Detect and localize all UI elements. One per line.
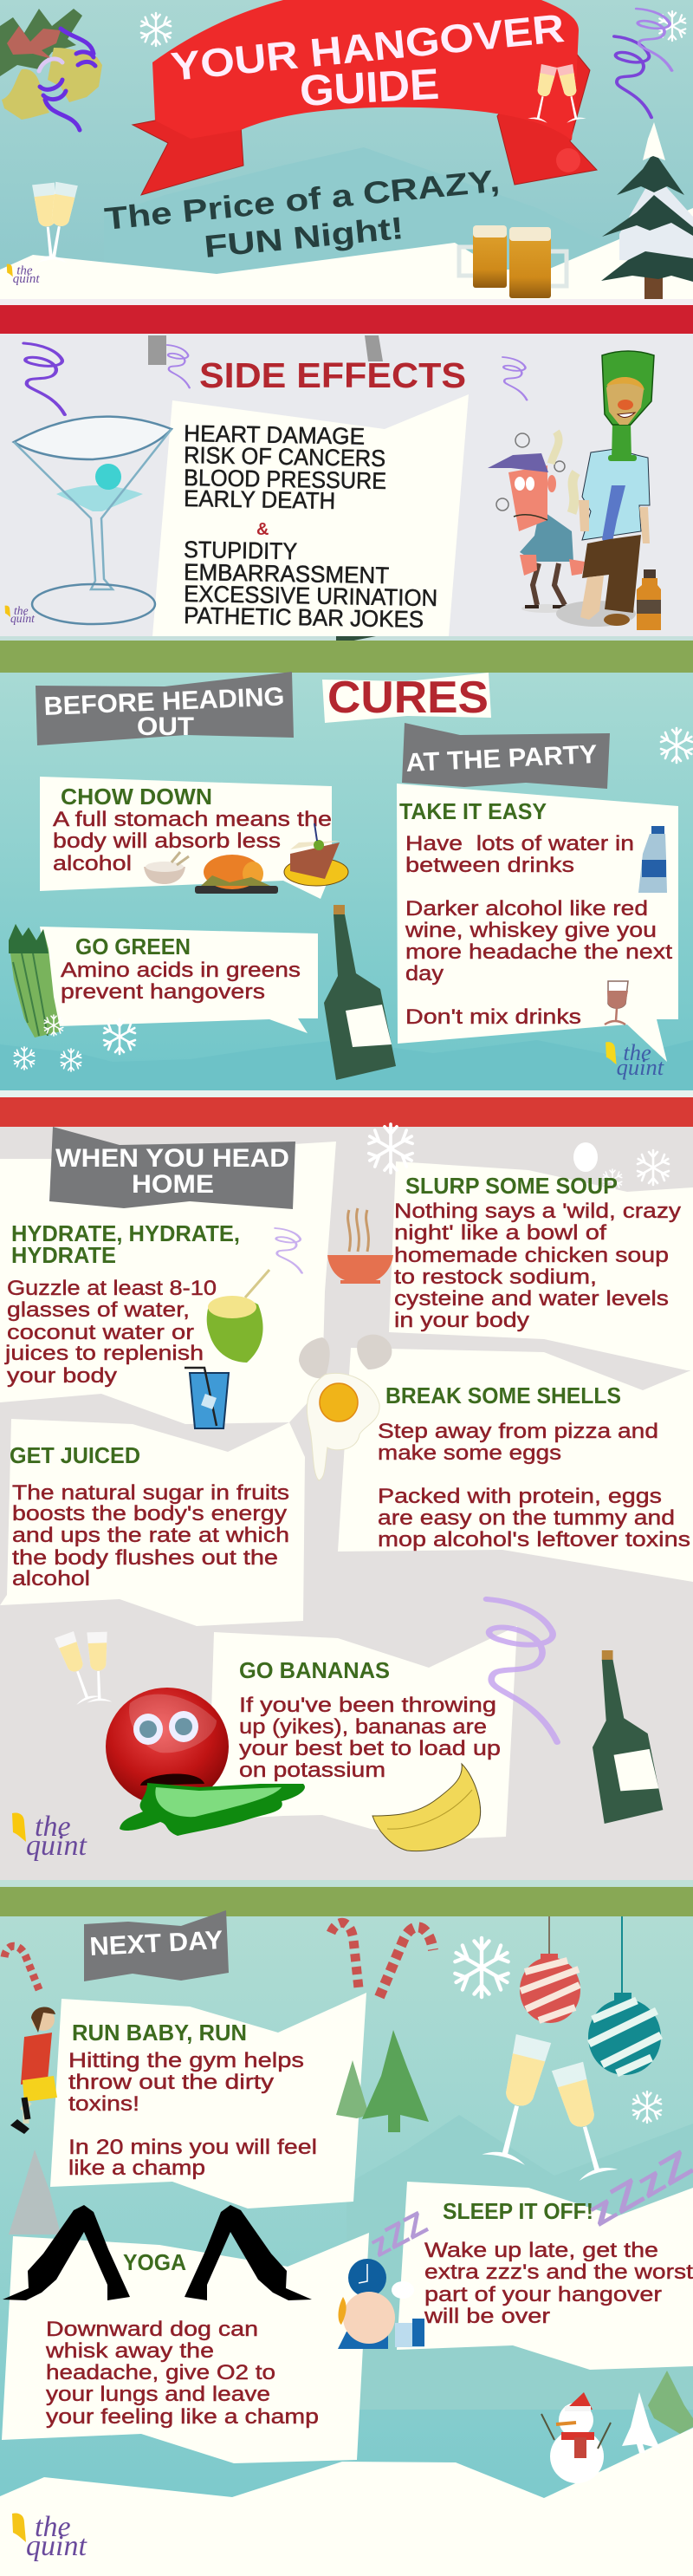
icon: club sandwich	[284, 823, 348, 886]
panel: at the party callout: wine, whiskey give you	[405, 919, 657, 942]
icon: confetti section left	[24, 343, 65, 414]
text block: slurp some soup: to restock sodium,	[394, 1265, 597, 1289]
panel: sleep it off: Wake up late, get the	[424, 2239, 658, 2262]
icon: green tree	[648, 2371, 693, 2434]
text block: hydrate: glasses of water,	[7, 1298, 190, 1322]
icon: yoga figure left	[3, 2205, 130, 2300]
text block: break some shells: Packed with protein, eggs	[378, 1485, 662, 1508]
icon: snowflake lower left	[104, 1019, 135, 1054]
icon: snowflake top	[141, 13, 171, 46]
decorative red bar	[0, 305, 693, 334]
text block: list of side effects: RISK OF CANCERS	[184, 442, 385, 472]
icon: snowflake top of home section	[369, 1124, 412, 1173]
icon: water bottle	[638, 826, 667, 893]
icon: dizzy man cartoon	[488, 432, 585, 613]
text block: hydrate: HYDRATE	[11, 1242, 116, 1268]
panel: chow down callout: CHOW DOWN	[61, 784, 212, 810]
heading ribbon: when you head home: HOME	[132, 1170, 214, 1199]
text block: go bananas: your best bet to load up	[239, 1737, 501, 1760]
icon: candy cane centre	[331, 1922, 359, 1988]
icon: soup bowl	[327, 1208, 393, 1284]
text block: get juiced: boosts the body's energy	[12, 1502, 287, 1525]
icon: cracked egg	[299, 1335, 392, 1480]
heading ribbon: before heading out: BEFORE HEADING	[43, 682, 285, 721]
panel: yoga: your lungs and leave	[46, 2383, 270, 2406]
icon: grey pine tree	[9, 2150, 61, 2234]
panel: at the party callout	[397, 784, 678, 1062]
text block: get juiced: alcohol	[12, 1567, 90, 1590]
panel: sleep it off: SLEEP IT OFF!	[443, 2198, 593, 2224]
icon: zzz right: zZzZ	[580, 2142, 693, 2235]
panel: sleep it off: will be over	[424, 2305, 550, 2328]
icon: confetti by heading	[167, 345, 190, 388]
panel: red ribbon banner	[133, 0, 597, 195]
subtitle: price of a crazy fun night	[103, 162, 502, 264]
text block: hydrate: HYDRATE, HYDRATE,	[11, 1220, 240, 1246]
panel: run baby run: Hitting the gym helps	[68, 2049, 304, 2072]
text block: slurp some soup: homemade chicken soup	[394, 1244, 669, 1267]
panel: at the party callout: between drinks	[405, 854, 574, 877]
text block: get juiced	[10, 1442, 289, 1590]
panel: yoga: your feeling like a champ	[46, 2405, 319, 2429]
text block: list of side effects: STUPIDITY	[184, 537, 297, 564]
icon: snowflake small left	[14, 1047, 35, 1070]
icon: confetti near bells	[39, 29, 95, 130]
panel: run baby run: In 20 mins you will feel	[68, 2136, 317, 2159]
panel: chow down callout: alcohol	[53, 852, 132, 875]
panel: yoga: headache, give O2 to	[46, 2361, 275, 2384]
panel: chow down callout: body will absorb less	[53, 829, 281, 853]
icon: wine bottle right	[593, 1650, 663, 1824]
heading ribbon: before heading out: OUT	[137, 712, 194, 741]
text block: list of side effects: EARLY DEATH	[184, 485, 335, 514]
icon: snowflake right	[661, 728, 692, 763]
icon: christmas bells	[0, 9, 102, 120]
logo: the quint top: quint	[13, 272, 40, 286]
icon: pine trees	[336, 2030, 429, 2132]
text block: list of side effects: &	[256, 520, 269, 539]
panel: sleep it off	[397, 2182, 693, 2370]
icon: confetti top right	[614, 36, 651, 118]
logo: the quint section two: quint	[10, 612, 36, 625]
icon: roast turkey	[195, 855, 278, 894]
icon: snowflake by flutes	[633, 2091, 661, 2123]
panel: run baby run	[50, 1993, 366, 2208]
panel: go green callout: GO GREEN	[75, 933, 191, 959]
logo: the quint bottom: quint	[26, 2530, 87, 2562]
heading ribbon: at the party	[402, 723, 610, 789]
title: your hangover guide	[169, 5, 567, 115]
text block: hydrate: your body	[7, 1364, 117, 1388]
icon: snowflake next day	[455, 1938, 508, 1997]
text block: break some shells	[378, 1382, 690, 1551]
icon: beer mugs	[459, 225, 567, 298]
logo: the quint home section: the	[35, 1811, 71, 1843]
heading ribbon: at the party: AT THE PARTY	[405, 740, 598, 777]
text block: hydrate: Guzzle at least 8-10	[7, 1277, 217, 1300]
logo: the quint section three: quint	[617, 1054, 664, 1080]
icon: confetti right of heading	[502, 357, 527, 400]
icon: runner	[10, 2007, 57, 2134]
logo: the quint bottom: the	[35, 2511, 71, 2543]
panel: cures background	[0, 673, 693, 1097]
icon: man with bottle head	[556, 351, 654, 627]
icon: coconut	[207, 1270, 269, 1363]
icon: whisky bottle	[637, 569, 661, 630]
icon: confetti go bananas	[487, 1599, 557, 1742]
icon: snowy pine tree	[601, 122, 693, 299]
text block: break some shells: make some eggs	[378, 1441, 561, 1465]
icon: banana	[372, 1764, 481, 1851]
panel: run baby run: like a champ	[68, 2156, 205, 2180]
icon: confetti hydrate	[275, 1228, 302, 1273]
icon: snowflake on asparagus	[44, 1015, 63, 1036]
panel: run baby run: throw out the dirty	[68, 2071, 274, 2094]
panel: sleep it off: part of your hangover	[424, 2283, 662, 2306]
panel: side effects	[0, 334, 693, 644]
decorative green bar two	[0, 1887, 693, 1916]
text block: list of side effects: BLOOD PRESSURE	[184, 465, 386, 494]
icon: asparagus	[9, 924, 61, 1038]
icon: teal bauble	[588, 1916, 661, 2075]
panel: at the party callout: more headache the next	[405, 940, 672, 964]
text block: get juiced: and ups the rate at which	[12, 1524, 289, 1547]
icon: candy cane left	[4, 1946, 40, 1992]
text block: hydrate	[4, 1220, 240, 1388]
icon: snowman	[541, 2392, 611, 2483]
heading ribbon: when you head home: WHEN YOU HEAD	[55, 1144, 289, 1173]
text block: slurp some soup: night' like a bowl of	[394, 1221, 606, 1245]
text block: get juiced: the body flushes out the	[12, 1546, 278, 1570]
heading: side effects: SIDE EFFECTS	[199, 355, 466, 395]
logo: the quint top	[7, 263, 40, 286]
icon: rice bowl	[144, 852, 189, 884]
panel: yoga: YOGA	[123, 2249, 186, 2275]
text block: break some shells: BREAK SOME SHELLS	[385, 1382, 621, 1408]
text block: get juiced: The natural sugar in fruits	[12, 1481, 289, 1505]
icon: yoga figure right	[185, 2205, 312, 2300]
icon: champagne flutes	[52, 1630, 112, 1705]
panel: run baby run: toxins!	[68, 2092, 139, 2116]
panel: go green callout	[40, 927, 318, 1033]
icon: candy cane right	[379, 1927, 433, 1997]
icon: champagne flutes next day	[482, 2033, 618, 2181]
logo: the quint bottom	[12, 2511, 87, 2562]
panel: run baby run: RUN BABY, RUN	[72, 2020, 247, 2046]
text block: slurp some soup	[394, 1173, 681, 1332]
panel: yoga: whisk away the	[45, 2339, 214, 2363]
text block: go bananas: on potassium	[239, 1759, 385, 1782]
logo: the quint section two	[5, 604, 36, 625]
icon: champagne flutes left	[29, 181, 81, 263]
logo: the quint section two: the	[14, 604, 29, 617]
logo: the quint section three	[606, 1039, 664, 1080]
icon: martini glass	[14, 417, 172, 624]
text block: go bananas: If you've been throwing	[239, 1694, 496, 1717]
text block: list of side effects: HEART DAMAGE	[184, 420, 365, 450]
subtitle: price of a crazy fun night: FUN Night!	[203, 210, 405, 264]
icon: zzz left: zZZ	[365, 2205, 433, 2265]
panel: at the party callout: Don't mix drinks	[405, 1005, 581, 1029]
icon: confetti top right small	[637, 9, 672, 71]
title: your hangover guide: GUIDE	[299, 60, 440, 115]
text block: get juiced: GET JUICED	[10, 1442, 140, 1468]
panel: sleep it off: extra zzz's and the worst	[424, 2261, 693, 2284]
panel: chow down callout: A full stomach means the	[53, 808, 332, 831]
panel: chow down callout	[40, 777, 332, 899]
text block: go bananas	[239, 1657, 501, 1782]
heading ribbon: when you head home	[49, 1127, 295, 1209]
icon: sleeping man with clock	[338, 2259, 424, 2349]
text block: break some shells: Step away from pizza and	[378, 1420, 658, 1443]
icon: green vomit	[120, 1783, 305, 1836]
panel: yoga: Downward dog can	[46, 2318, 258, 2341]
panel: at the party callout: Darker alcohol like red	[405, 897, 648, 920]
icon: water glass	[185, 1368, 229, 1428]
icon: wine bottle	[324, 905, 396, 1080]
panel: at the party callout: Have lots of water in	[405, 832, 634, 855]
text block: break some shells: are easy on the tummy and	[378, 1506, 675, 1530]
panel: when you head home background	[0, 1127, 693, 1880]
logo: the quint section three: the	[623, 1039, 651, 1065]
panel: at the party callout: day	[405, 962, 444, 986]
decorative red bar two	[0, 1097, 693, 1127]
panel: go green callout: Amino acids in greens	[61, 959, 301, 982]
text block: hydrate: juices to replenish	[4, 1342, 204, 1365]
text block: hydrate: coconut water or	[7, 1321, 194, 1344]
title: your hangover guide: YOUR HANGOVER	[169, 5, 567, 89]
heading ribbon: next day: NEXT DAY	[89, 1926, 223, 1961]
heading: cures: CURES	[327, 673, 489, 723]
icon: champagne glasses on ribbon	[528, 64, 586, 123]
text block: list of side effects	[184, 420, 437, 633]
icon: snowflake top right	[659, 11, 685, 41]
subtitle: price of a crazy fun night: The Price of a CRAZY,	[103, 162, 502, 237]
text block: slurp some soup: Nothing says a 'wild, crazy	[394, 1200, 681, 1223]
icon: snowflake right home section	[638, 1150, 669, 1185]
heading ribbon: next day	[84, 1910, 229, 1981]
icon: wine glass	[605, 981, 628, 1025]
text block: slurp some soup: SLURP SOME SOUP	[405, 1173, 618, 1199]
panel: at the party callout: TAKE IT EASY	[399, 798, 547, 824]
icon: red bauble	[520, 1916, 580, 2023]
text block: slurp some soup: cysteine and water levels	[394, 1287, 669, 1311]
panel: next day background	[0, 1916, 693, 2576]
icon: snowflake faint right home section	[603, 1169, 622, 1190]
text block: break some shells: mop alcohol's leftover toxins	[378, 1528, 690, 1551]
decorative green bar	[0, 641, 693, 673]
icon: white tree	[622, 2392, 660, 2453]
icon: sick red emoji	[106, 1688, 229, 1805]
text block: list of side effects: EMBARRASSMENT	[184, 559, 389, 589]
panel: title section background	[0, 0, 693, 305]
text block: list of side effects: EXCESSIVE URINATION	[184, 581, 437, 611]
heading ribbon: before heading out	[36, 672, 294, 745]
logo: the quint home section	[12, 1811, 87, 1862]
text block: go bananas: up (yikes), bananas are	[239, 1715, 487, 1739]
panel: yoga	[2, 2233, 369, 2463]
decorative pale strip	[0, 1880, 693, 1887]
icon: snowflake small centre	[61, 1049, 81, 1071]
text block: go bananas: GO BANANAS	[239, 1657, 390, 1683]
logo: the quint top: the	[16, 263, 33, 277]
text block: list of side effects: PATHETIC BAR JOKES	[184, 602, 424, 633]
panel: go green callout: prevent hangovers	[61, 980, 265, 1004]
text block: slurp some soup: in your body	[394, 1309, 529, 1332]
logo: the quint home section: quint	[26, 1830, 87, 1862]
